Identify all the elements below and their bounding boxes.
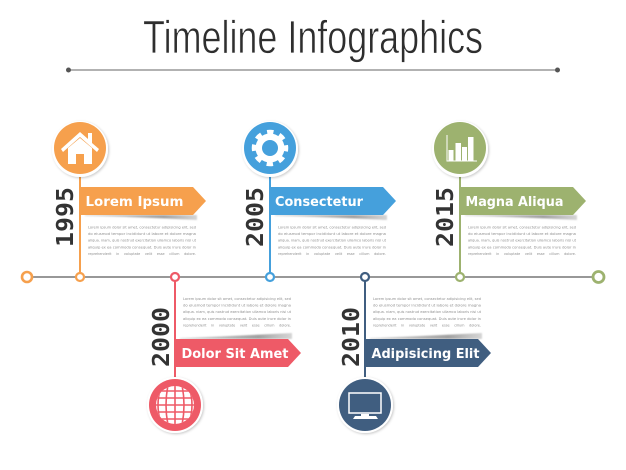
body text: aliquip ex ea commodo consequat. Duis aute irure dolor in xyxy=(373,316,481,321)
banner label: Adipisicing Elit xyxy=(372,346,480,362)
year: 2015 xyxy=(433,187,459,247)
banner shadow xyxy=(370,333,482,339)
banner label: Magna Aliqua xyxy=(466,194,564,210)
body text: aliqua. niam, quis nostrud exercitation ullamco laboris nisi ut xyxy=(468,238,576,242)
icon: gear xyxy=(242,121,298,177)
body text xyxy=(373,296,482,328)
year: 2005 xyxy=(243,187,269,247)
banner label: Dolor Sit Amet xyxy=(182,346,289,362)
body text: reprehenderit in voluptate velit esse cillum dolore. xyxy=(183,322,291,328)
body text xyxy=(88,224,197,256)
icon: globe xyxy=(147,377,203,433)
banner shadow xyxy=(180,333,292,339)
body text: reprehenderit in voluptate velit esse cillum dolore. xyxy=(278,251,386,256)
milestone: 1995 xyxy=(52,121,206,281)
body text: aliqua. niam, quis nostrud exercitation ullamco laboris nisi ut xyxy=(183,309,291,314)
body text: aliquip ex ea commodo consequat. Duis aute irure dolor in xyxy=(278,244,386,250)
banner xyxy=(80,187,206,215)
title: Timeline Infographics xyxy=(143,11,483,63)
body text: do eiusmod tempor incididunt ut labore et dolore magna xyxy=(373,302,482,308)
icon: bar chart xyxy=(432,121,488,177)
body text: Lorem ipsum dolor sit amet, consectetur adipisicing elit, sed xyxy=(88,224,196,230)
year: 1995 xyxy=(53,187,79,247)
body text: do eiusmod tempor incididunt ut labore et dolore magna xyxy=(88,231,197,236)
year: 2000 xyxy=(149,307,175,367)
body text: do eiusmod tempor incididunt ut labore et dolore magna xyxy=(183,302,292,308)
banner xyxy=(270,187,396,215)
body text: do eiusmod tempor incididunt ut labore et dolore magna xyxy=(468,231,577,236)
body text xyxy=(468,224,577,256)
milestone: 2015 xyxy=(432,121,586,281)
body text: aliqua. niam, quis nostrud exercitation ullamco laboris nisi ut xyxy=(88,238,196,242)
banner shadow xyxy=(85,215,197,220)
body text: do eiusmod tempor incididunt ut labore et dolore magna xyxy=(278,231,387,236)
body text: aliqua. niam, quis nostrud exercitation ullamco laboris nisi ut xyxy=(278,238,386,242)
body text: reprehenderit in voluptate velit esse cillum dolore. xyxy=(468,251,576,256)
body text: aliquip ex ea commodo consequat. Duis aute irure dolor in xyxy=(468,244,576,250)
body text: reprehenderit in voluptate velit esse cillum dolore. xyxy=(88,251,196,256)
banner label: Lorem Ipsum xyxy=(86,194,184,210)
body text xyxy=(183,296,292,328)
body text: Lorem ipsum dolor sit amet, consectetur adipisicing elit, sed xyxy=(183,296,291,301)
milestone: 2000 xyxy=(147,273,301,433)
icon: monitor xyxy=(337,377,393,433)
body text: aliquip ex ea commodo consequat. Duis aute irure dolor in xyxy=(88,244,196,250)
icon: house xyxy=(52,121,108,177)
banner shadow xyxy=(465,215,577,220)
body text: Lorem ipsum dolor sit amet, consectetur adipisicing elit, sed xyxy=(373,296,481,301)
banner shadow xyxy=(275,215,387,220)
milestone: 2005 xyxy=(242,121,396,281)
banner xyxy=(460,187,586,215)
body text: Lorem ipsum dolor sit amet, consectetur adipisicing elit, sed xyxy=(278,224,386,230)
title rule xyxy=(66,68,560,72)
body text: Lorem ipsum dolor sit amet, consectetur adipisicing elit, sed xyxy=(468,224,576,230)
body text xyxy=(278,224,387,256)
body text: aliqua. niam, quis nostrud exercitation ullamco laboris nisi ut xyxy=(373,309,481,314)
milestone: 2010 xyxy=(337,273,491,433)
body text: aliquip ex ea commodo consequat. Duis aute irure dolor in xyxy=(183,316,291,321)
timeline axis xyxy=(22,272,604,282)
body text: reprehenderit in voluptate velit esse cillum dolore. xyxy=(373,322,481,328)
banner label: Consectetur xyxy=(275,194,363,210)
banner xyxy=(175,339,301,367)
banner xyxy=(365,339,491,367)
year: 2010 xyxy=(339,307,365,367)
